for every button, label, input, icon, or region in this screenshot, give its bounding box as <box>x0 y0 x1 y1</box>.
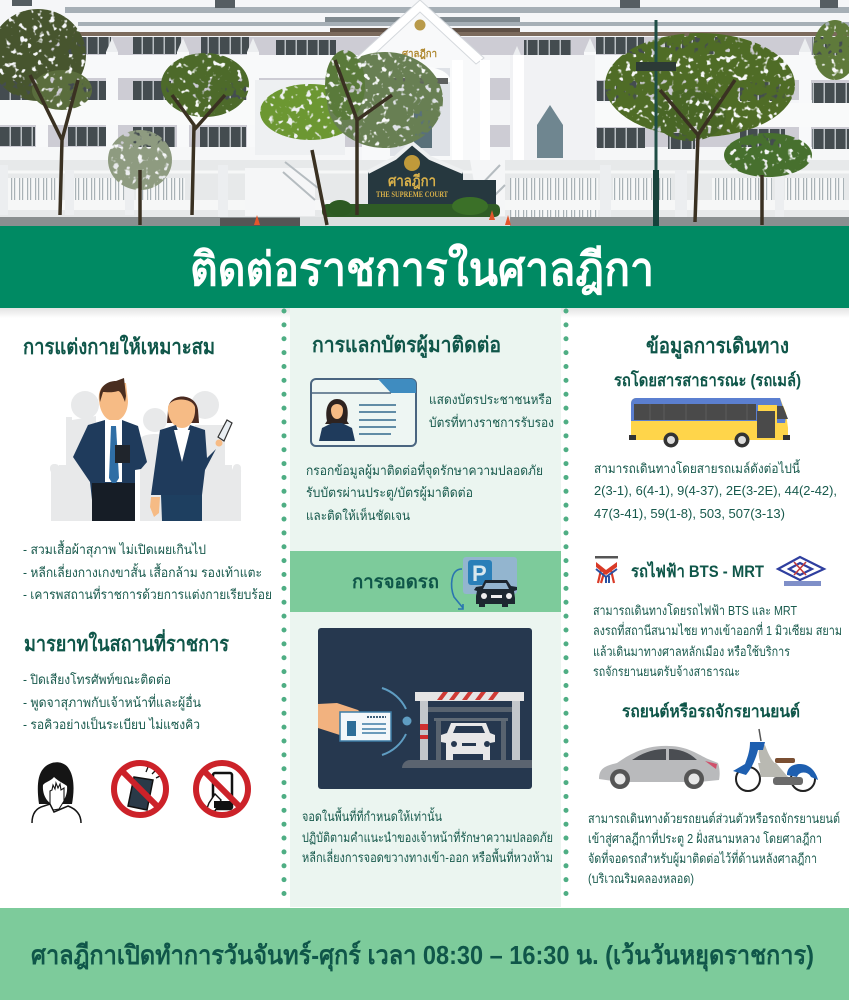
heading: travel: ข้อมูลการเดินทาง <box>646 334 789 360</box>
visitor registration text: และติดให้เห็นชัดเจน <box>306 506 410 523</box>
dotted divider: right <box>564 311 568 900</box>
icon: parking sign with car: P <box>472 561 487 586</box>
heading: visitor card: การแลกบัตรผู้มาติดต่อ <box>312 333 501 359</box>
bus routes: สามารถเดินทางโดยสายรถเมล์ดังต่อไปนี้ <box>594 459 800 476</box>
subheading: bus: รถโดยสารสาธารณะ (รถเมล์) <box>614 370 801 390</box>
parking rules text <box>302 807 553 865</box>
parking rules text: ปฏิบัติตามคำแนะนำของเจ้าหน้าที่รักษาความปลอดภัย <box>302 829 553 845</box>
subheading: car or motorcycle: รถยนต์หรือรถจักรยานยนต์ <box>622 701 800 721</box>
card instructions: บัตรที่ทางราชการรับรอง <box>429 414 554 430</box>
dress guidelines: - สวมเสื้อผ้าสุภาพ ไม่เปิดเผยเกินไป <box>23 540 206 558</box>
car directions <box>588 811 840 886</box>
visitor registration text: กรอกข้อมูลผู้มาติดต่อที่จุดรักษาความปลอดภัย <box>306 462 543 479</box>
icon: motorcycle <box>733 729 818 791</box>
photo: Supreme Court building: ศาลฎีกา <box>388 173 436 190</box>
dotted divider: left <box>282 311 286 900</box>
footer: office hours <box>0 908 849 1000</box>
icon: car <box>599 746 720 789</box>
icon: MRT logo <box>778 557 824 586</box>
parking heading band <box>290 551 561 612</box>
etiquette guidelines: - ปิดเสียงโทรศัพท์ขณะติดต่อ <box>23 672 171 687</box>
title banner <box>0 226 849 308</box>
panel: etiquette <box>23 628 248 823</box>
icon: no phone ringing <box>114 763 166 815</box>
bus routes: 47(3-41), 59(1-8), 503, 507(3-13) <box>594 506 785 521</box>
photo: Supreme Court building: ศาลฎีกา <box>402 48 437 60</box>
illustration: office workers <box>50 378 241 521</box>
etiquette guidelines: - รอคิวอย่างเป็นระเบียบ ไม่แซงคิว <box>23 715 200 732</box>
etiquette guidelines <box>23 672 201 732</box>
dress guidelines: - เคารพสถานที่ราชการด้วยการแต่งกายเรียบร้อย <box>23 586 272 602</box>
rail directions: แล้วเดินมาทางศาลหลักเมือง หรือใช้บริการ <box>593 644 790 659</box>
car directions: (บริเวณริมคลองหลอด) <box>588 871 694 886</box>
visitor registration text: รับบัตรผ่านประตู/บัตรผู้มาติดต่อ <box>306 485 473 501</box>
parking rules text: หลีกเลี่ยงการจอดขวางทางเข้า-ออก หรือพื้นที่หวงห้าม <box>302 848 553 865</box>
card instructions <box>429 392 554 430</box>
title banner: ติดต่อราชการในศาลฎีกา <box>190 242 654 295</box>
subheading: BTS MRT: รถไฟฟ้า BTS - MRT <box>631 561 765 581</box>
bus routes: 2(3-1), 6(4-1), 9(4-37), 2E(3-2E), 44(2-42), <box>594 483 837 498</box>
icon: no phone use <box>196 763 248 815</box>
dress guidelines: - หลีกเลี่ยงกางเกงขาสั้น เสื้อกล้าม รองเท้าแตะ <box>23 563 262 580</box>
panel: parking <box>290 551 561 865</box>
parking rules text: จอดในพื้นที่ที่กำหนดให้เท่านั้น <box>302 807 442 824</box>
photo: Supreme Court building <box>0 0 849 226</box>
rail directions: สามารถเดินทางโดยรถไฟฟ้า BTS และ MRT <box>593 603 797 618</box>
panel: travel information <box>588 334 842 886</box>
rail directions <box>593 603 842 679</box>
parking heading band: การจอดรถ <box>352 572 439 593</box>
icon: parking sign with car <box>452 557 517 609</box>
icon: BTS logo <box>595 556 618 583</box>
icon: ID card <box>311 379 416 446</box>
illustration: parking gate <box>318 628 532 789</box>
panel: centre column background <box>290 308 561 907</box>
etiquette guidelines: - พูดจาสุภาพกับเจ้าหน้าที่และผู้อื่น <box>23 694 201 711</box>
heading: dress: การแต่งกายให้เหมาะสม <box>23 334 215 359</box>
icon: bus <box>629 398 790 448</box>
photo: Supreme Court building: THE SUPREME COURT <box>376 190 449 199</box>
panel: visitor card exchange <box>306 333 554 523</box>
dress guidelines <box>23 540 272 602</box>
icon: quiet person <box>32 762 81 823</box>
heading: etiquette: มารยาทในสถานที่ราชการ <box>24 628 230 656</box>
panel: appropriate dress <box>23 334 272 602</box>
bus routes <box>594 459 837 521</box>
visitor registration text <box>306 462 543 523</box>
card instructions: แสดงบัตรประชาชนหรือ <box>429 392 552 407</box>
rail directions: รถจักรยานยนตรับจ้างสาธารณะ <box>593 664 740 679</box>
